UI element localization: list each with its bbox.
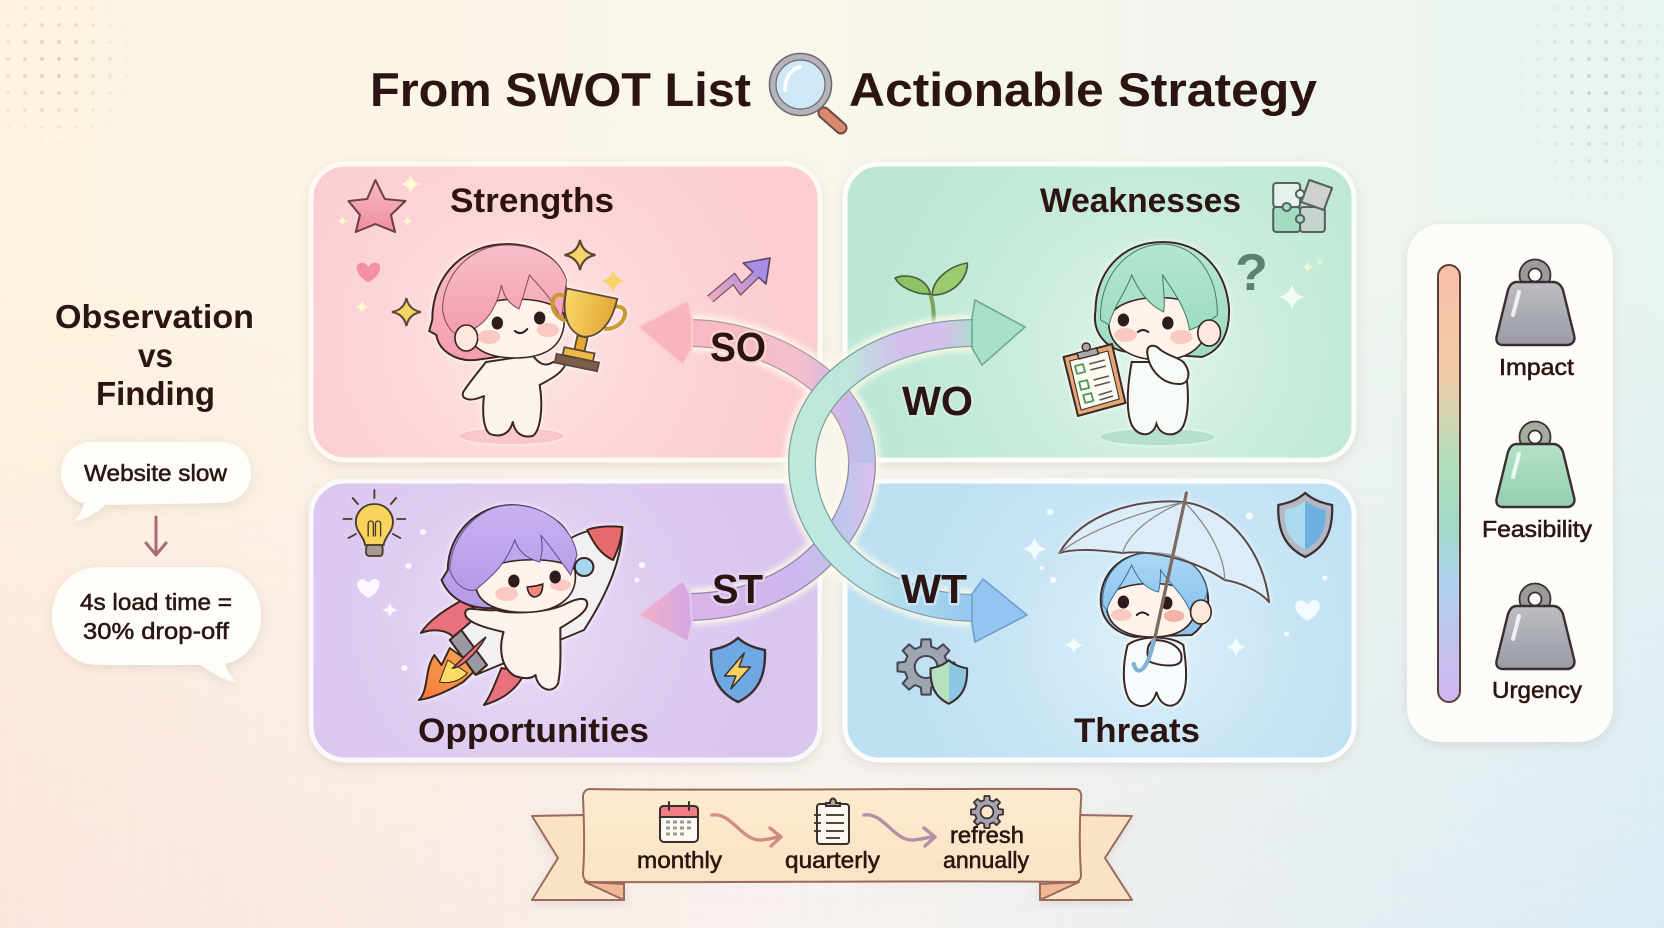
icon: zigzag growth arrow — [710, 258, 770, 299]
speech bubble: finding: 4s load time = — [80, 589, 232, 615]
step: quarterly — [785, 798, 881, 873]
label: ST: ST — [712, 566, 763, 612]
panel: weaknesses — [845, 164, 1354, 460]
heading: observation vs finding — [55, 298, 254, 412]
title: From SWOT List — [370, 63, 751, 116]
step: refresh annually: refresh — [950, 822, 1024, 848]
icon: shield with lightning — [711, 638, 765, 702]
character: pink with trophy — [429, 244, 628, 444]
weight: impact — [1496, 260, 1575, 380]
icon: question mark: ? — [1235, 244, 1268, 302]
label: SO: SO — [710, 324, 766, 370]
banner: review cadence — [532, 789, 1132, 900]
weight: feasibility — [1482, 422, 1593, 542]
arrow: SO — [638, 300, 862, 463]
speech bubble: finding: 30% drop-off — [83, 618, 230, 644]
icon: heart — [357, 263, 380, 282]
icon: trophy — [540, 286, 628, 374]
gradient scale bar — [1438, 265, 1460, 702]
arrow glow — [690, 333, 975, 608]
step: monthly: monthly — [637, 847, 723, 873]
heading: observation vs finding: vs — [138, 337, 173, 374]
step: refresh annually — [943, 796, 1029, 873]
weight: urgency — [1492, 584, 1583, 703]
icon: white heart and sparkles — [357, 529, 645, 671]
panel: opportunities — [311, 481, 820, 760]
icon: star — [337, 174, 421, 232]
title — [370, 54, 1317, 128]
heading: threats: Threats — [1074, 712, 1200, 750]
character: purple riding rocket — [419, 505, 622, 705]
icon: clipboard — [814, 798, 849, 844]
icon: shield — [1278, 493, 1332, 557]
icon: light bulb — [343, 490, 405, 556]
icon: umbrella — [1059, 493, 1269, 671]
icon: sparkle — [1278, 258, 1324, 310]
panel illustrations: threats — [898, 493, 1332, 706]
panel: threats — [845, 481, 1354, 760]
icon: gear with shield — [898, 639, 967, 704]
panel illustrations: opportunities — [343, 490, 765, 705]
weight: impact: Impact — [1499, 354, 1575, 380]
label: WT: WT — [901, 566, 967, 612]
panel: strengths — [311, 164, 820, 460]
panel illustrations: weaknesses — [895, 180, 1332, 445]
arrow: monthly to quarterly — [712, 815, 781, 846]
speech bubble: observation: Website slow — [84, 460, 227, 486]
weight: feasibility: Feasibility — [1482, 516, 1593, 542]
speech bubble: finding — [52, 567, 261, 682]
arrow: WO — [802, 300, 1025, 463]
heading: observation vs finding: Finding — [96, 375, 215, 412]
speech bubble: observation — [61, 442, 251, 521]
panel: prioritisation weights — [1407, 224, 1613, 742]
heading: strengths: Strengths — [450, 182, 614, 220]
icon: sparkles and heart — [1022, 509, 1327, 657]
icon: rocket — [419, 526, 622, 705]
heading: observation vs finding: Observation — [55, 298, 254, 335]
label: WO: WO — [902, 378, 973, 424]
side panel: observation vs finding — [52, 298, 261, 682]
ribbon tails — [532, 815, 1132, 900]
icon: calendar — [660, 802, 698, 842]
icon: clipboard — [1063, 343, 1125, 416]
heading: opportunities: Opportunities — [418, 712, 649, 750]
icon: sprout — [895, 263, 967, 326]
icon: puzzle — [1273, 180, 1332, 232]
icon: gold sparkles — [392, 240, 625, 326]
arrow: WT — [802, 463, 1027, 642]
arrow: ST — [638, 463, 862, 642]
arrow: observation to finding — [146, 517, 166, 555]
step: monthly — [637, 802, 723, 873]
step: refresh annually: annually — [943, 847, 1029, 873]
icon: gear — [971, 796, 1003, 828]
character: blue with umbrella — [1059, 493, 1269, 706]
arrow: quarterly to annual refresh — [864, 815, 935, 846]
weight: urgency: Urgency — [1492, 677, 1583, 703]
heading: weaknesses: Weaknesses — [1040, 182, 1241, 220]
panel illustrations: strengths — [337, 174, 770, 444]
swot strategy arrows — [638, 300, 1027, 642]
icon: magnifying glass — [770, 54, 841, 128]
character: green with clipboard — [1063, 242, 1229, 445]
ribbon body — [583, 789, 1081, 882]
step: quarterly: quarterly — [785, 847, 881, 873]
title: Actionable Strategy — [849, 63, 1317, 116]
